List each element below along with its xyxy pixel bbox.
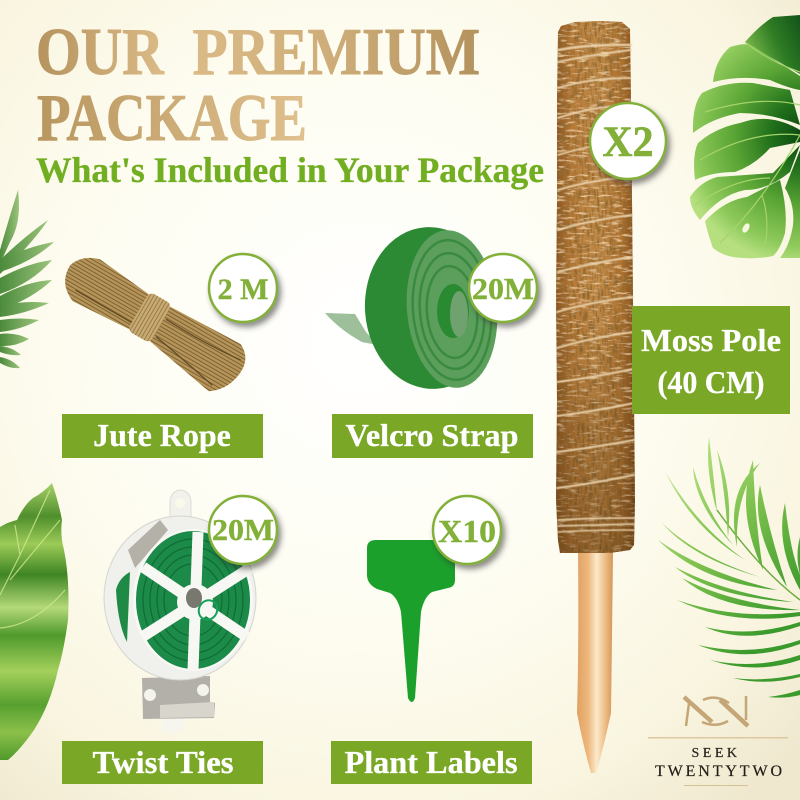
quantity badge: X2	[590, 103, 666, 179]
quantity badge: X10	[433, 496, 501, 564]
label: plant labels: Plant Labels	[344, 744, 518, 780]
quantity badge: 2 M	[209, 254, 277, 322]
label: moss pole: Moss Pole	[641, 322, 781, 358]
reel body	[104, 516, 256, 680]
label: jute rope: Jute Rope	[93, 417, 231, 453]
left palm leaf	[0, 190, 54, 368]
strap tail	[325, 313, 383, 345]
wire twist	[195, 597, 221, 623]
coir cylinder	[556, 21, 635, 553]
subtitle: What's Included in Your Package	[36, 150, 544, 190]
outer roll band	[360, 223, 502, 393]
label: twist ties	[62, 741, 263, 784]
quantity badge: X2: X2	[602, 119, 654, 166]
label: moss pole	[632, 306, 790, 414]
quantity badge: X10: X10	[438, 513, 496, 549]
reel hub	[177, 584, 213, 620]
quantity badge: 2 M: 2 M	[218, 273, 268, 306]
twist tie reel	[104, 490, 256, 732]
palm frond bottom right	[658, 437, 800, 698]
metal cutter bracket	[142, 676, 215, 732]
wooden stake	[577, 552, 613, 773]
title: OUR PREMIUM	[36, 15, 480, 89]
twine wraps	[557, 45, 634, 532]
title	[36, 15, 480, 155]
label: velcro strap: Velcro Strap	[346, 417, 518, 453]
lower shading	[556, 300, 635, 553]
brand logo	[648, 696, 788, 786]
hanging hook	[170, 490, 191, 520]
divider top	[648, 737, 788, 738]
label: twist ties: Twist Ties	[92, 744, 234, 780]
quantity badge: twist ties 20M: 20M	[212, 512, 274, 547]
monstera leaf	[690, 15, 800, 258]
quantity badge: velcro 20M	[469, 254, 537, 322]
quantity badge: velcro 20M: 20M	[472, 271, 534, 306]
divider bottom	[684, 785, 748, 786]
brand name: SEEK	[692, 746, 740, 761]
plant label stake	[367, 540, 455, 702]
left large leaf	[0, 483, 68, 760]
label: jute rope	[62, 414, 263, 458]
quantity badge: twist ties 20M	[209, 496, 277, 564]
jute rope	[50, 248, 254, 400]
logo mark	[684, 696, 748, 726]
title: PACKAGE	[37, 81, 307, 155]
brand logo: TWENTYTWO	[655, 763, 782, 780]
green wire coil	[136, 531, 250, 669]
roll hole	[437, 284, 469, 338]
moss pole	[556, 21, 635, 773]
white spokes	[142, 532, 250, 670]
velcro strap roll	[325, 223, 504, 393]
roll face	[400, 226, 504, 392]
label: velcro strap	[332, 414, 533, 458]
label: moss pole: (40 CM)	[658, 364, 764, 400]
